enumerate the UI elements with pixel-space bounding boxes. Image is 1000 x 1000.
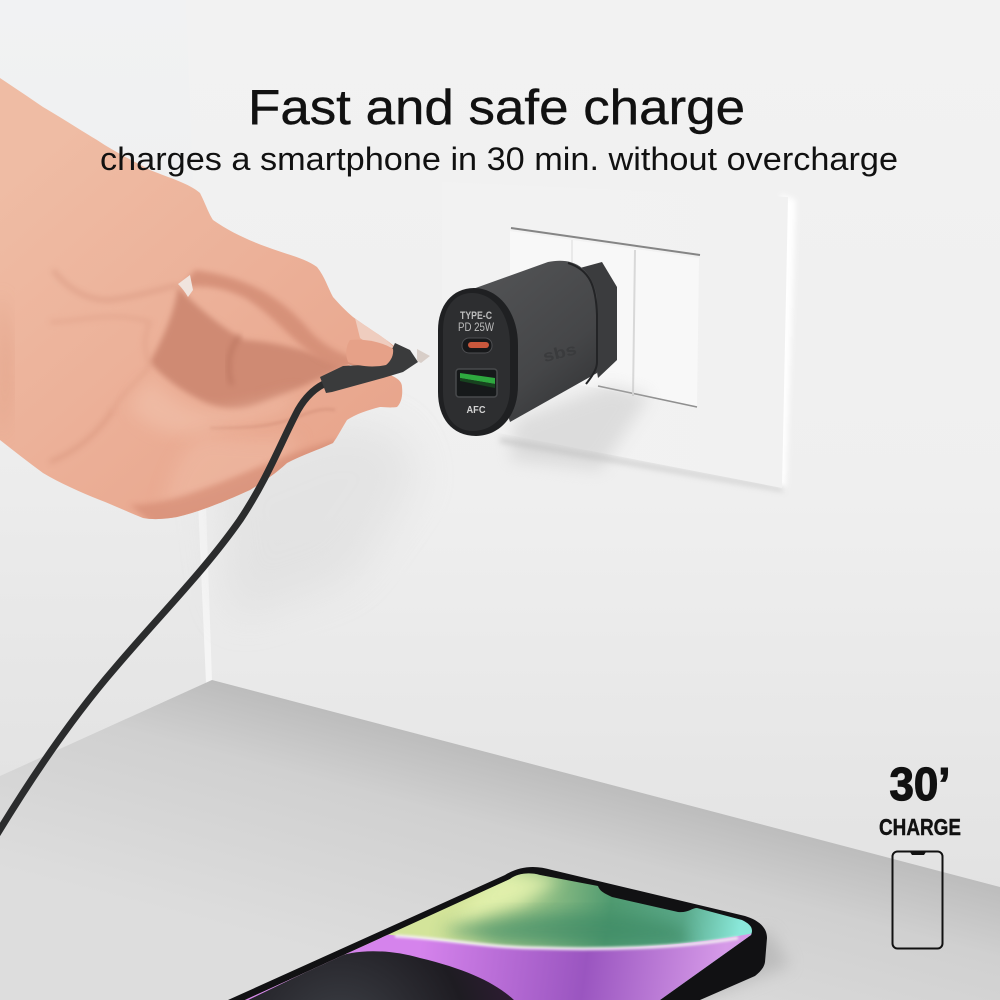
connector tip: [417, 349, 430, 363]
wall corner highlight: [188, 275, 212, 683]
soft shadow of hand on wall: [210, 420, 420, 620]
ring finger crease: [210, 409, 335, 428]
hand: [0, 78, 402, 530]
phone body: [228, 867, 767, 1000]
plug base: [580, 262, 617, 378]
connector sleeve: [320, 343, 418, 393]
index finger in shadow: [150, 287, 345, 409]
front rim: [438, 288, 518, 436]
label afc: AFC: [466, 405, 486, 416]
pale top corner: [464, 873, 560, 916]
index knuckle fold: [229, 335, 240, 385]
plate glow edge: [770, 194, 796, 488]
lower edge shadow: [132, 440, 334, 520]
plate face: [442, 182, 788, 488]
hand silhouette: [0, 78, 402, 519]
phone: [228, 860, 790, 1000]
hand shading: [0, 270, 394, 530]
charger: [438, 261, 617, 436]
gap between thumb and index: [178, 275, 193, 297]
little finger shading: [171, 442, 285, 496]
subtitle: charges a smartphone in 30 min. without overcharge: [100, 141, 898, 177]
30 minutes label: 30’: [890, 758, 950, 810]
dark sphere: [240, 951, 518, 1000]
thumb base fold: [53, 270, 178, 300]
palm crease lower: [50, 410, 113, 462]
charger shadow on plate: [510, 385, 650, 470]
palm crease upper: [50, 317, 150, 410]
screen green wallpaper: [245, 873, 752, 1000]
title: Fast and safe charge: [248, 81, 745, 135]
thumb tip overlapping connector: [346, 340, 393, 366]
wall plate: [442, 182, 796, 492]
cable: [0, 343, 430, 836]
cable cord: [0, 382, 328, 836]
label pd 25w: PD 25W: [458, 320, 495, 334]
usb-a port: [456, 369, 497, 397]
rear rim: [568, 263, 597, 384]
wrist shadow: [1, 348, 10, 392]
left wall: [0, 0, 212, 776]
usb-c port: [462, 338, 492, 353]
screen purple wallpaper: [240, 932, 760, 1000]
deep green band: [440, 912, 690, 945]
wave highlight: [395, 936, 738, 949]
front face: [443, 293, 510, 431]
rocker divider left: [571, 240, 573, 365]
label type-c: TYPE-C: [460, 310, 492, 322]
embossed logo: sbs: [541, 341, 579, 366]
floor: [0, 680, 1000, 1000]
switch bottom line: [598, 386, 697, 407]
rocker divider right: [633, 250, 635, 396]
palm highlight: [139, 391, 274, 432]
phone shadow: [640, 930, 790, 1000]
charger body: [470, 261, 597, 422]
icon: smartphone outline: [892, 852, 942, 948]
switch frame: [510, 231, 699, 407]
charge time badge: [879, 758, 961, 948]
plate shadow: [500, 437, 784, 492]
switch recess line: [511, 228, 700, 255]
charge label: CHARGE: [879, 814, 961, 840]
thumb nail: [355, 318, 394, 348]
thumb underside: [187, 268, 358, 366]
screen: [245, 873, 752, 1000]
